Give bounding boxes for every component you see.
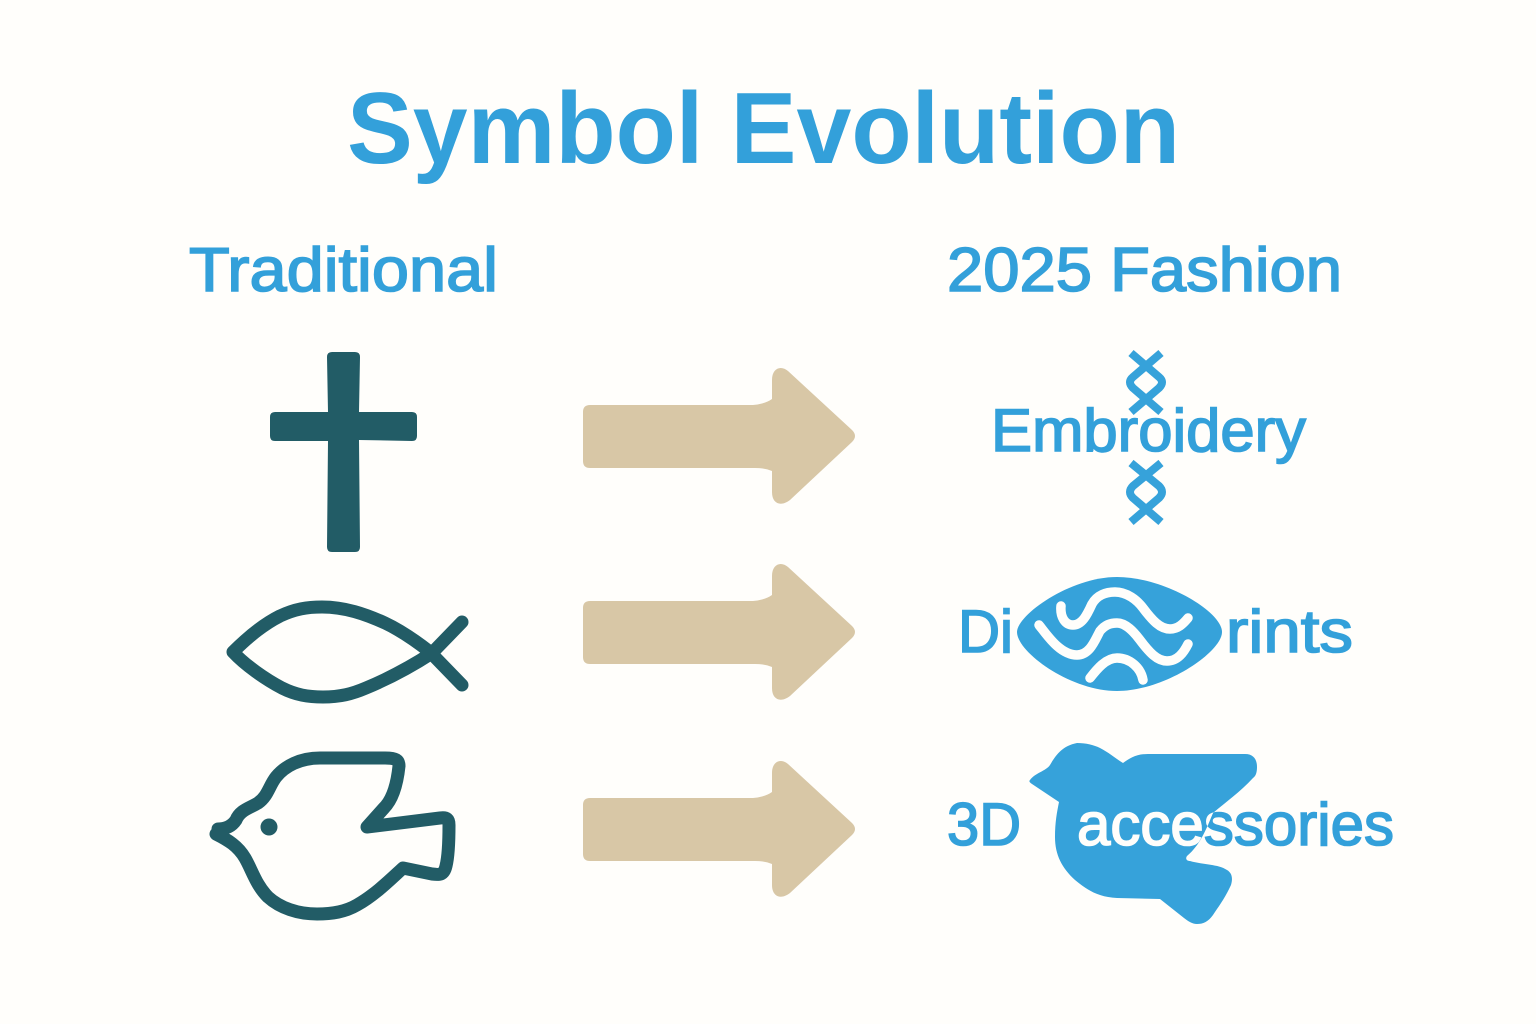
arrow: row 1 (583, 368, 855, 504)
icon: dove outline (216, 758, 449, 914)
label: accessories white overlap: accessories (1077, 791, 1394, 858)
icon: dove eye (260, 818, 278, 836)
arrow: row 3 (583, 761, 855, 897)
icon: lens waves (1039, 592, 1188, 680)
embroidery cross group (991, 353, 1306, 522)
heading: 2025 Fashion: 2025 Fashion (947, 236, 1342, 305)
label: accessories: accessories (1077, 791, 1394, 858)
digital prints group (958, 577, 1353, 691)
icon: cross (270, 352, 417, 552)
icon: lower stitch knot (1130, 463, 1162, 522)
icon: upper stitch knot (1130, 353, 1162, 412)
label: Embroidery: Embroidery (991, 397, 1306, 464)
label: 3D: 3D (947, 791, 1021, 858)
icon: solid dove (1029, 743, 1257, 924)
icon: fish outline (233, 607, 462, 697)
3D accessories group (947, 743, 1394, 924)
arrow: row 2 (583, 564, 855, 700)
title: Symbol Evolution (347, 73, 1180, 185)
icon: patterned lens (1017, 577, 1222, 691)
heading: Traditional: Traditional (189, 236, 498, 305)
label: rints: rints (1226, 598, 1353, 665)
label: Di: Di (958, 598, 1013, 665)
